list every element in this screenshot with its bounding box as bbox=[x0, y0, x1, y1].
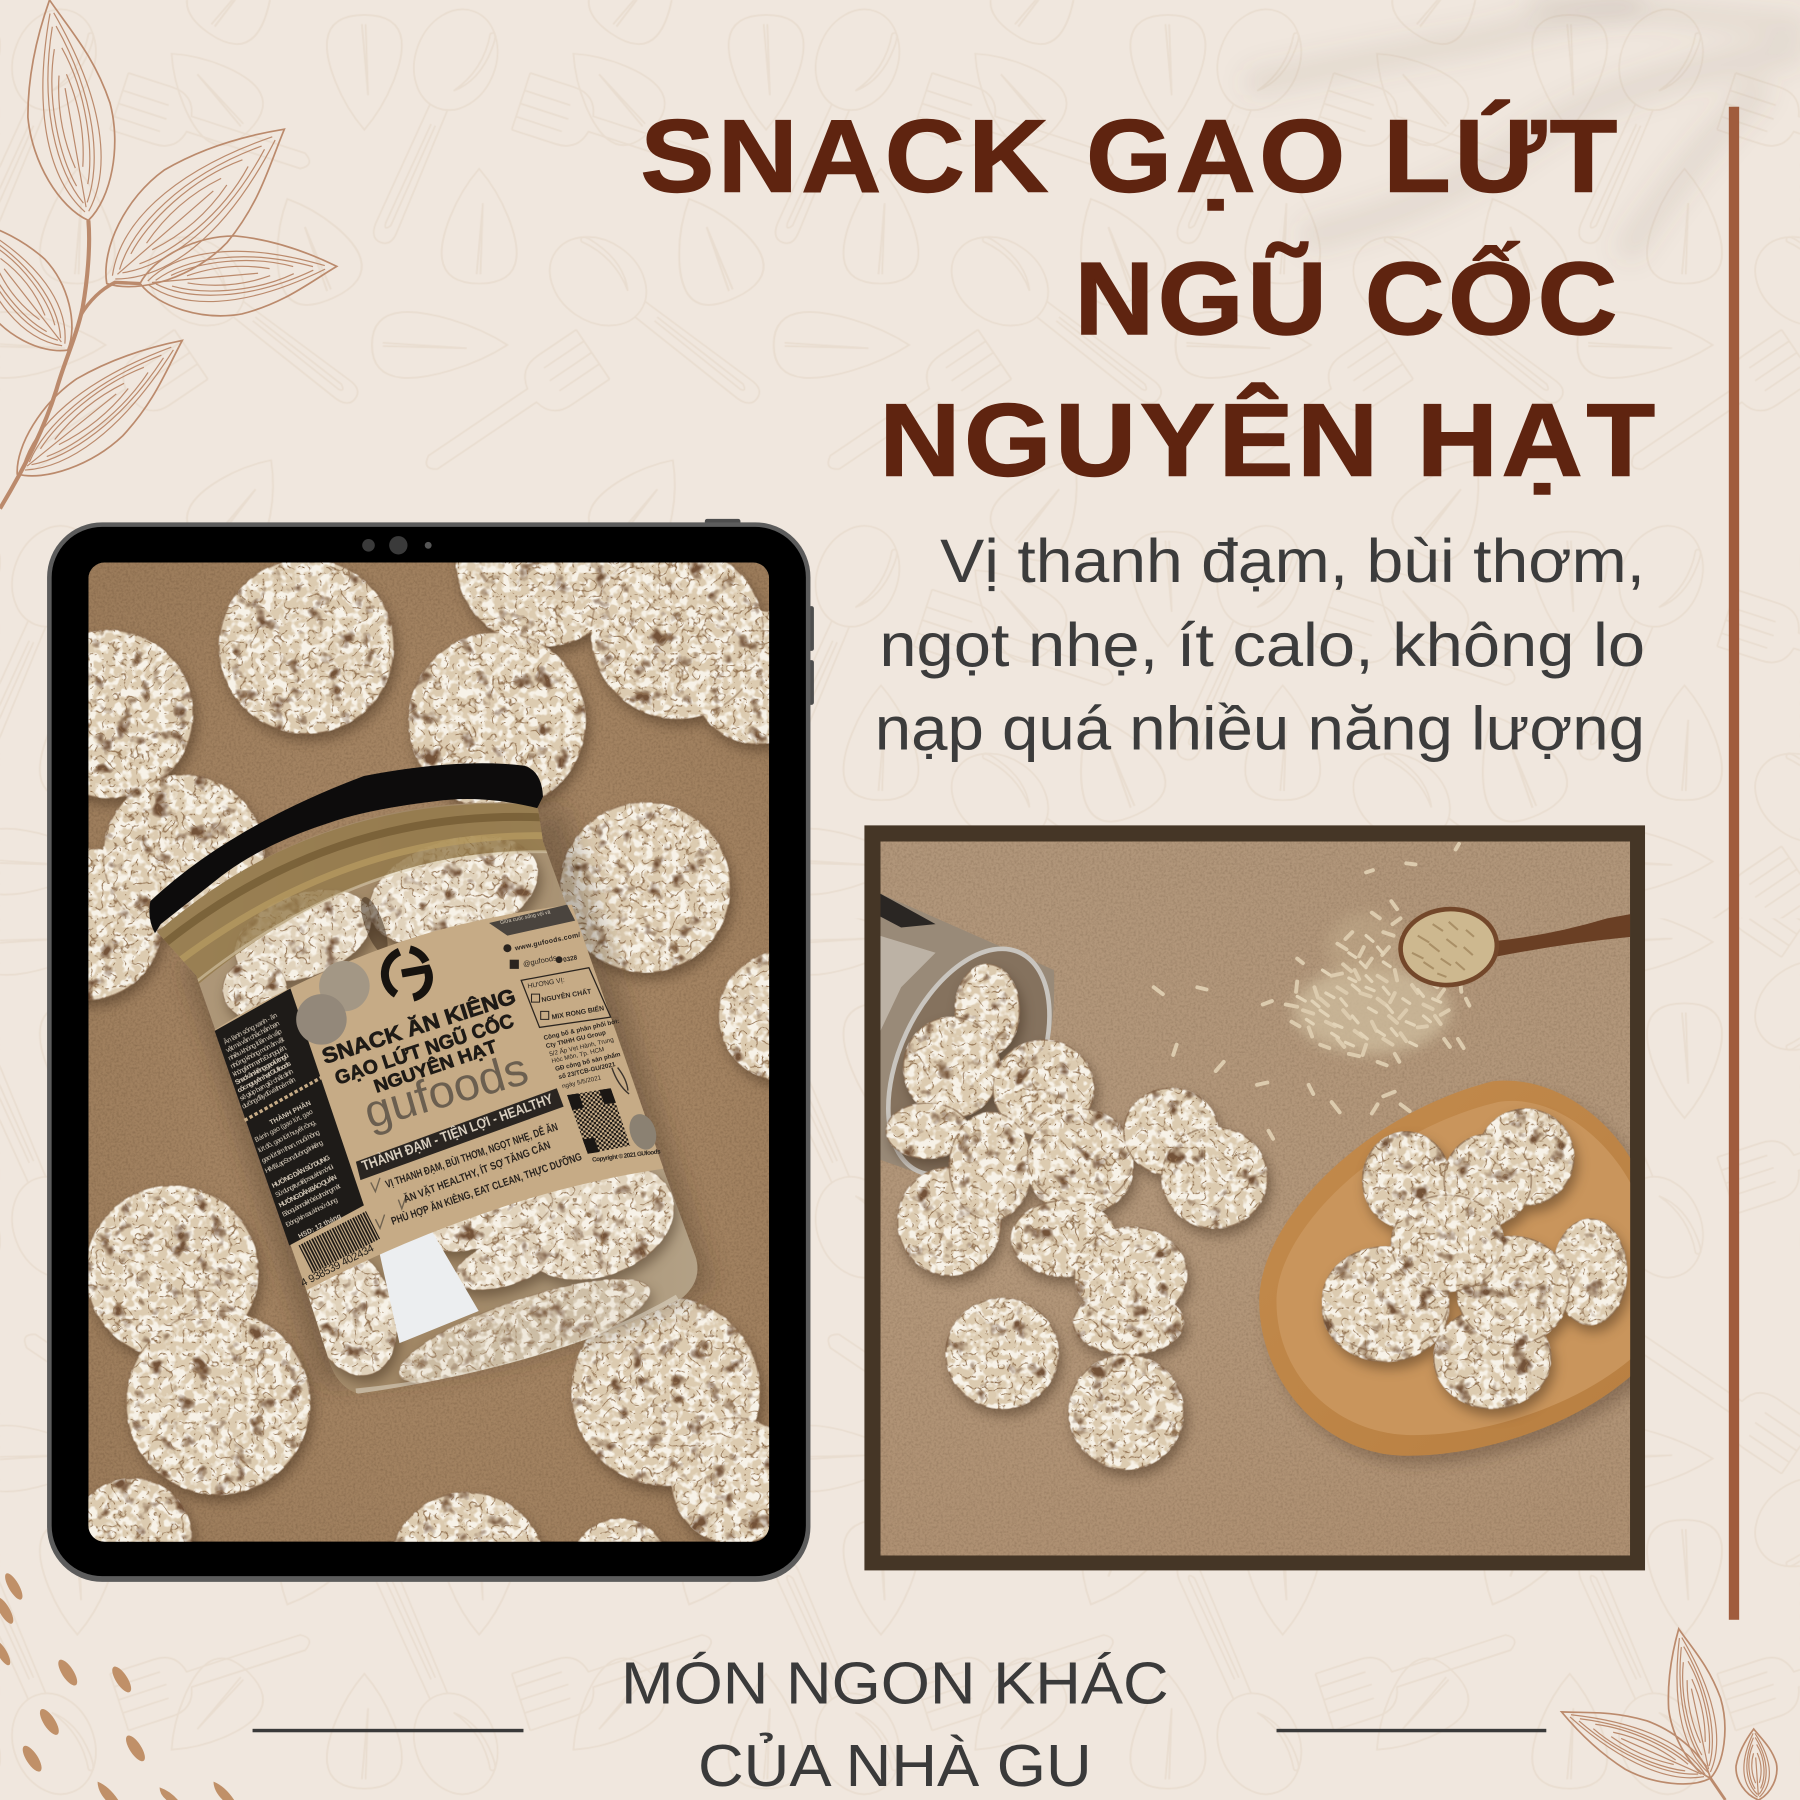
label black column: cốc nguyên hạt GUfoods bbox=[236, 1059, 293, 1095]
label black column: Bánh gạo (gạo lứt, gạo bbox=[254, 1109, 314, 1144]
subtitle text: ngọt nhẹ, ít calo, không lo bbox=[879, 611, 1645, 679]
label black column: Đóng kín sau khi sử dụng bbox=[284, 1196, 339, 1229]
label black column: sẽ giúp bạn giữ chất dinh bbox=[238, 1067, 295, 1103]
footer heading: MÓN NGON KHÁC bbox=[621, 1650, 1169, 1717]
label info column: Hóc Môn, Tp. HCM bbox=[551, 1046, 605, 1065]
rice cakes spilled from jar bbox=[886, 964, 1267, 1469]
label black column: vặt mà vẫn chắc hắn bạn bbox=[224, 1018, 281, 1054]
icon: scattered brown seeds, bottom left bbox=[0, 1571, 234, 1800]
label info column: Cty TNHH GU Group bbox=[545, 1029, 607, 1050]
jar lid bbox=[149, 763, 543, 933]
brown rice pile and grains bbox=[1154, 844, 1469, 1139]
label heading: GẠO LỨT NGŨ CỐC bbox=[332, 1008, 517, 1090]
label bullet points: PHÙ HỢP ĂN KIÊNG, EAT CLEAN, THỰC DƯỠNG bbox=[389, 1150, 584, 1228]
label heading: NGUYÊN HẠT bbox=[371, 1035, 500, 1097]
jar shadow bbox=[184, 804, 712, 1383]
wooden spoon with rice bbox=[1395, 903, 1632, 991]
vertical accent bar bbox=[1729, 107, 1739, 1620]
label logo G and cake sketch bbox=[296, 949, 429, 1045]
cakes inside jar bbox=[155, 804, 690, 1405]
label info column: www.gufoods.com/ bbox=[513, 932, 581, 953]
label info column bbox=[489, 905, 661, 1164]
label info column: số 23/TCB-GU/2021 bbox=[558, 1060, 617, 1081]
label black column: HƯỚNG DẪN SỬ DỤNG bbox=[270, 1153, 331, 1190]
label bullet points: VỊ THANH ĐẠM, BÙI THƠM, NGỌT NHẸ, DỄ ĂN bbox=[384, 1120, 560, 1191]
label black column: Hi Mã Lạp Sơn, đường ăn kiêng bbox=[264, 1139, 325, 1175]
label bullet points: ĂN VẶT HEALTHY, ÍT SỢ TĂNG CÂN bbox=[402, 1138, 552, 1206]
label QR code bbox=[567, 1088, 630, 1154]
label black band: THÀNH ĐẠM - TIỆN LỢI - HEALTHY bbox=[359, 1089, 556, 1175]
label barcode: 4 938539 402434 bbox=[299, 1242, 376, 1290]
label black column: HSD: 12 tháng bbox=[297, 1213, 342, 1240]
subtitle text: Vị thanh đạm, bùi thơm, bbox=[940, 527, 1645, 595]
footer heading: CỦA NHÀ GU bbox=[698, 1732, 1092, 1799]
label black column: nhiều không ít lần và vấp bbox=[226, 1026, 283, 1062]
title: NGUYÊN HẠT bbox=[879, 381, 1659, 497]
label info column: Công bố & phân phối bởi: bbox=[543, 1017, 620, 1042]
jar lying on its side bbox=[856, 893, 1082, 1200]
label black column: gạo lứt tím than, muối hồng bbox=[260, 1127, 321, 1165]
label black column: những không món ăn vặt bbox=[230, 1036, 286, 1071]
label info column: 5/2 Ấp Vẹt Hành, Trung bbox=[548, 1033, 615, 1058]
tablet frame bbox=[47, 519, 814, 1582]
panel: tablet with product photo bbox=[47, 518, 814, 1582]
label info column: @gufoods bbox=[522, 953, 558, 969]
label heading: SNACK ĂN KIÊNG bbox=[319, 983, 519, 1069]
footer heading bbox=[621, 1650, 1169, 1799]
label black column: THÀNH PHẦN bbox=[267, 1097, 312, 1127]
title: SNACK GẠO LỨT bbox=[641, 98, 1621, 214]
panel: framed photo of rice cakes on a wooden plate bbox=[856, 825, 1648, 1570]
label black column bbox=[215, 988, 364, 1246]
label black column: lứt đỏ, gạo lứt huyết rồng, bbox=[256, 1117, 318, 1154]
tablet photo: rice cakes and jar bbox=[88, 562, 770, 1542]
loose rice cakes bbox=[88, 562, 770, 1542]
label barcode bbox=[298, 1211, 380, 1290]
label info column: GĐ công bố sản phẩm bbox=[554, 1050, 622, 1073]
label black column: Snack ăn kiêng gạo lứt ngũ bbox=[234, 1052, 290, 1087]
rice cakes on plate bbox=[1322, 1109, 1627, 1409]
footer divider lines bbox=[253, 1729, 1546, 1732]
label black column: Sử dụng trực tiếp sau khi mở túi bbox=[273, 1162, 335, 1199]
label info column: Giữa cuộc sống vội vã bbox=[500, 909, 551, 926]
label black column: dưỡng đầy đủ và thoả mãn bbox=[240, 1075, 297, 1111]
label info column: ngày 5/5/2021 bbox=[561, 1074, 602, 1090]
label info column: Copyright © 2021 GUfoods bbox=[592, 1147, 661, 1164]
label bullet points bbox=[371, 1120, 584, 1228]
jar bbox=[149, 763, 697, 1405]
label brand: gufoods bbox=[358, 1042, 534, 1138]
subtitle text: nạp quá nhiều năng lượng bbox=[875, 695, 1645, 763]
title: NGŨ CỐC bbox=[1074, 240, 1621, 356]
wooden plate bbox=[1259, 1081, 1648, 1465]
label info column: MIX RONG BIỂN bbox=[551, 1003, 605, 1021]
jar label bbox=[215, 905, 664, 1290]
label info column: HƯƠNG VỊ: bbox=[527, 977, 565, 990]
label black column: Bảo quản nơi khô ráo, thoáng mát bbox=[281, 1183, 342, 1219]
label info column: 0328 bbox=[563, 954, 578, 964]
icon: botanical branch, top left bbox=[0, 0, 340, 509]
title bbox=[641, 98, 1659, 497]
jar body bbox=[157, 802, 697, 1394]
subtitle text bbox=[875, 527, 1645, 763]
label black column: HƯỚNG DẪN BẢO QUẢN bbox=[277, 1172, 338, 1209]
icon: botanical branch, bottom right bbox=[1551, 1623, 1779, 1800]
label black column: Ăn lành sống xanh - ăn bbox=[222, 1010, 279, 1046]
label info column: NGUYÊN CHẤT bbox=[540, 985, 593, 1004]
palm leaf shadow, top right bbox=[1257, 2, 1798, 247]
label black column: không lành mạnh. Đừng quên, bbox=[232, 1044, 288, 1079]
